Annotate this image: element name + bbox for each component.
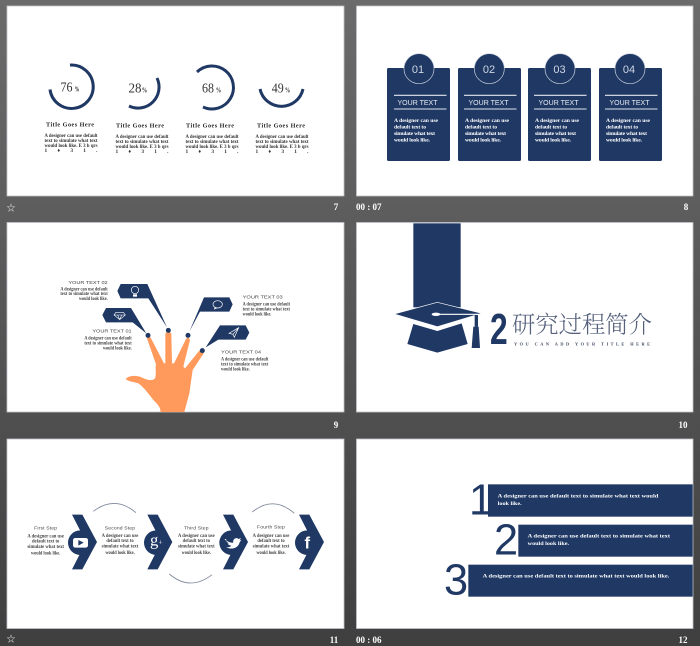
card 01: YOUR TEXT xyxy=(398,98,438,107)
card 03: simulate what text xyxy=(535,131,576,137)
timer slide 12: 00 : 06 xyxy=(356,635,382,645)
slide number 12: 12 xyxy=(678,635,688,645)
ring 68 percent xyxy=(197,66,233,109)
icon: star footer slide 11: ☆ xyxy=(6,634,16,644)
ring 28 percent xyxy=(128,78,159,108)
step 4 text xyxy=(253,525,290,556)
list item 3: A designer can use default text to simulate what text would look like. xyxy=(483,573,670,579)
icon: star footer slide 7: ☆ xyxy=(6,203,16,213)
step 4 chevron: facebook icon: f xyxy=(305,534,311,553)
text block 01: A designer can use default xyxy=(84,336,132,342)
column text 3: text to simulate what text xyxy=(186,139,239,145)
text block 04: YOUR TEXT 04 xyxy=(221,349,261,355)
step 3 text: default text to xyxy=(183,538,210,544)
bubble: paper plane xyxy=(206,325,249,347)
hand illustration xyxy=(126,332,204,412)
column text 1: would look like. E 3 b qrs xyxy=(44,143,98,149)
list item 1 xyxy=(469,476,693,524)
step 1 text: default text to xyxy=(32,539,60,545)
column text 4: text to simulate what text xyxy=(256,139,309,145)
section subtitle: YOU CAN ADD YOUR TITLE HERE xyxy=(514,341,650,346)
step 2 text: would look like. xyxy=(105,550,135,556)
ring 76 percent: 76 xyxy=(60,80,72,96)
finger dots xyxy=(145,328,205,353)
column text 2: text to simulate what text xyxy=(116,139,169,145)
text block 03: would look like. xyxy=(243,311,272,317)
card 02: would look like. xyxy=(465,138,502,144)
step 2 text: A designer can use xyxy=(102,533,139,539)
panel: slide 10 section title xyxy=(356,222,693,412)
panel: slide 12 numbered list xyxy=(356,439,693,628)
slide number 10: 10 xyxy=(678,420,688,430)
card 03: would look like. xyxy=(535,138,572,144)
text block 04: would look like. xyxy=(221,366,250,372)
panel: slide 7 progress rings xyxy=(7,6,344,196)
step 2 chevron: google plus icon: + xyxy=(158,538,162,547)
step 3 text: simulate what text xyxy=(178,543,215,549)
ring 49 percent: % xyxy=(285,86,290,94)
column text 1: Title Goes Here xyxy=(46,122,94,128)
step 2 chevron: google plus icon xyxy=(144,515,172,569)
card 03: 03 xyxy=(553,64,566,76)
card 01: A designer can use xyxy=(394,118,439,124)
step 2 text xyxy=(102,525,139,556)
list item 2: would look like. xyxy=(528,541,570,547)
vertical banner xyxy=(413,223,461,307)
ring 49 percent: 49 xyxy=(272,82,284,96)
step 1 text xyxy=(27,525,65,557)
step 4 text: would look like. xyxy=(256,550,286,556)
list item 2: 2 xyxy=(494,516,518,564)
text block 03: text to simulate what text xyxy=(243,306,290,312)
text block 02: A designer can use default xyxy=(60,286,108,292)
card 01: would look like. xyxy=(394,138,431,144)
list item 2: A designer can use default text to simulate what text xyxy=(528,533,670,539)
card 02: 02 xyxy=(483,64,495,76)
panel: slide 8 numbered cards xyxy=(356,6,693,196)
step 1 text: would look like. xyxy=(31,551,61,557)
text block 03: YOUR TEXT 03 xyxy=(243,294,283,300)
timer slide 8: 00 : 07 xyxy=(356,202,382,212)
card 03: default text to xyxy=(535,124,567,130)
step 1 text: simulate what text xyxy=(27,544,64,550)
step 2 text: default text to xyxy=(106,538,134,544)
list item 3 xyxy=(444,557,693,605)
card 04 xyxy=(599,54,662,161)
bubble: speech xyxy=(189,297,233,332)
card 03: YOUR TEXT xyxy=(538,98,579,107)
step 4 text: A designer can use xyxy=(253,533,290,539)
text block 01: YOUR TEXT 01 xyxy=(92,328,132,334)
list item 3: 3 xyxy=(444,557,468,605)
text block 02: would look like. xyxy=(79,296,108,302)
step 3 text: would look like. xyxy=(182,550,212,556)
card 02 xyxy=(458,54,521,161)
step 1 text: A designer can use xyxy=(27,534,65,540)
list item 1: A designer can use default text to simulate what text would xyxy=(498,493,659,499)
ring 28 percent: % xyxy=(142,87,147,95)
text block 03: A designer can use default xyxy=(243,302,290,308)
panel: slide 9 hand diagram xyxy=(7,222,344,412)
step 3 chevron: twitter icon xyxy=(219,515,248,569)
text block 04 xyxy=(221,349,269,372)
card 02: A designer can use xyxy=(465,118,510,124)
step 2 chevron: google plus icon: g xyxy=(150,530,159,549)
text block 01: would look like. xyxy=(103,345,132,351)
ring 76 percent xyxy=(50,65,93,108)
step 4 text: Fourth Step xyxy=(257,525,285,531)
step 1 chevron: video icon xyxy=(68,515,97,569)
section number: 2 xyxy=(490,306,508,354)
card 03 xyxy=(528,54,591,161)
card 04: simulate what text xyxy=(606,131,647,137)
slide number 9: 9 xyxy=(334,420,339,430)
column text 3: 1 ♦ 3 1 . xyxy=(186,149,239,155)
slide number 11: 11 xyxy=(330,635,339,645)
column text 2: would look like. E 3 b qrs xyxy=(116,144,168,150)
connector arcs xyxy=(93,503,294,583)
column text 4: would look like. E 3 b qrs xyxy=(256,144,308,150)
icon: graduation cap xyxy=(394,302,482,353)
list item 1: look like. xyxy=(498,501,522,507)
step 2 text: simulate what text xyxy=(102,543,139,549)
panel: slide 11 four steps xyxy=(7,439,344,628)
card 04: would look like. xyxy=(606,138,643,144)
ring 76 percent: % xyxy=(74,86,80,94)
step 2 text: Second Step xyxy=(105,525,135,531)
slide number 7: 7 xyxy=(334,202,339,212)
column text 3: A designer can use default xyxy=(186,134,239,140)
ring 28 percent: 28 xyxy=(128,82,142,97)
column text 4: Title Goes Here xyxy=(257,122,305,130)
text block 02: YOUR TEXT 02 xyxy=(68,280,108,286)
column text 3 xyxy=(186,122,239,155)
step 3 text: Third Step xyxy=(184,525,209,531)
column text 2 xyxy=(116,122,169,155)
card 02: default text to xyxy=(465,124,497,130)
section title: 研究过程简介 xyxy=(512,306,652,340)
step 4 text: simulate what text xyxy=(253,543,290,549)
text block 02 xyxy=(60,280,108,302)
text block 03 xyxy=(243,294,290,317)
card 03: A designer can use xyxy=(535,118,580,124)
card 01 xyxy=(387,54,450,161)
column text 2: 1 ♦ 3 1 . xyxy=(116,149,169,155)
column text 4 xyxy=(256,122,309,155)
column text 3: would look like. E 3 b qrs xyxy=(186,144,238,150)
column text 2: Title Goes Here xyxy=(116,122,164,130)
column text 1: 1 ♦ 3 1 . xyxy=(44,148,98,154)
bubble: diamond xyxy=(102,308,146,333)
card 04: 04 xyxy=(623,64,635,76)
column text 1: text to simulate what text xyxy=(44,138,98,144)
ring 49 percent xyxy=(260,82,303,106)
text block 01 xyxy=(84,328,132,351)
column text 4: 1 ♦ 3 1 . xyxy=(256,149,309,155)
column text 3: Title Goes Here xyxy=(186,122,234,130)
column text 4: A designer can use default xyxy=(256,134,309,140)
text block 04: A designer can use default xyxy=(221,357,269,363)
text block 01: text to simulate what text xyxy=(84,340,132,346)
card 04: A designer can use xyxy=(606,118,651,124)
ring 68 percent: % xyxy=(216,86,221,94)
ring 68 percent: 68 xyxy=(202,82,214,96)
text block 02: text to simulate what text xyxy=(60,291,108,297)
card 04: default text to xyxy=(606,124,638,130)
column text 1 xyxy=(44,122,98,154)
step 1 text: First Step xyxy=(34,525,57,531)
column text 1: A designer can use default xyxy=(44,133,98,139)
card 02: YOUR TEXT xyxy=(468,98,509,107)
card 01: simulate what text xyxy=(394,131,435,137)
card 02: simulate what text xyxy=(465,131,506,137)
list item 2 xyxy=(494,516,693,564)
card 01: 01 xyxy=(412,64,424,76)
step 4 text: default text to xyxy=(257,538,285,544)
slide number 8: 8 xyxy=(684,202,689,212)
card 04: YOUR TEXT xyxy=(610,98,650,107)
text block 04: text to simulate what text xyxy=(221,361,269,367)
step 3 text: A designer can use xyxy=(178,533,215,539)
list item 1: 1 xyxy=(469,476,493,524)
card 01: default text to xyxy=(394,124,426,130)
bubble: light bulb xyxy=(117,284,167,327)
step 4 chevron: facebook icon xyxy=(295,515,324,569)
step 3 text xyxy=(178,525,215,556)
column text 2: A designer can use default xyxy=(116,134,169,140)
